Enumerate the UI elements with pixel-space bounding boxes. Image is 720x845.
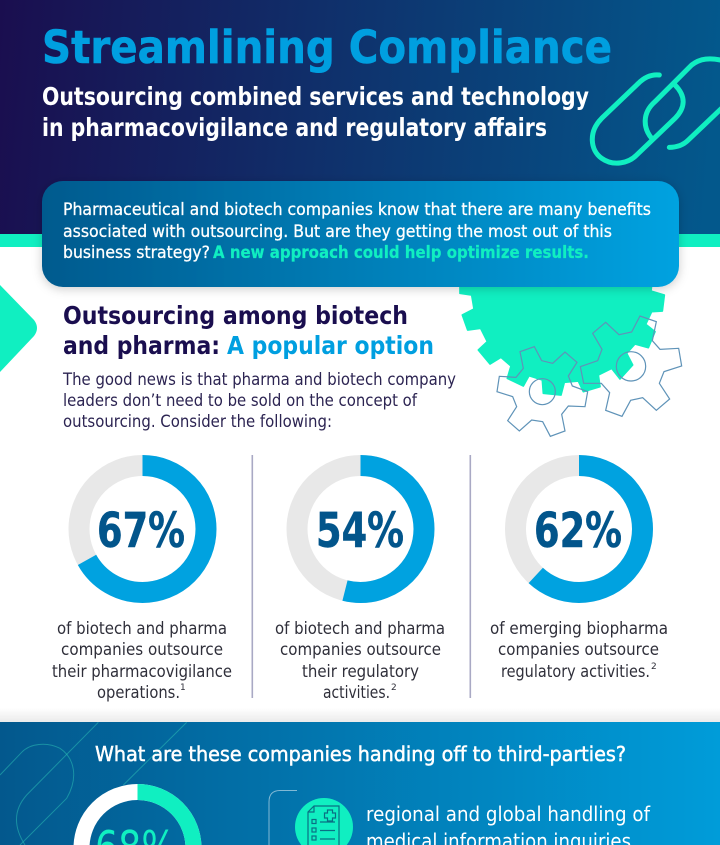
stat: 67%: 1 — [180, 683, 186, 693]
intro paragraph: The good news is that pharma and biotech company — [62, 370, 456, 390]
stat: 62%: 2 — [651, 662, 657, 672]
stat: 54%: 54% — [316, 503, 404, 559]
intro card: A new approach could help optimize results. — [213, 243, 589, 263]
outline gear right — [580, 316, 682, 416]
section heading: Outsourcing among biotech — [63, 301, 408, 330]
bottom section shadow — [0, 708, 720, 722]
stat: 68% — [82, 792, 194, 845]
stat: 62%: companies outsource — [498, 640, 659, 660]
stat: 67% — [52, 466, 232, 703]
intro card: associated with outsourcing. But are they getting the most out of this — [63, 222, 612, 242]
intro paragraph: outsourcing. Consider the following: — [63, 412, 332, 432]
stat: 54%: 2 — [391, 683, 397, 693]
icon: medical document — [295, 798, 353, 845]
left teal arrow tab — [0, 285, 37, 372]
section heading — [63, 301, 434, 360]
intro paragraph — [62, 370, 456, 432]
bracket line — [269, 790, 297, 845]
teal accent strip — [0, 234, 720, 247]
subtitle — [42, 82, 589, 142]
stat: 54%: their regulatory — [302, 662, 419, 682]
intro card: business strategy? — [63, 243, 210, 263]
section heading: and pharma: — [63, 331, 220, 360]
title: Streamlining Compliance — [42, 21, 612, 74]
stat: 67%: companies outsource — [61, 640, 223, 660]
section heading: A popular option — [227, 331, 434, 360]
stat: 54%: companies outsource — [280, 640, 441, 660]
list item text: regional and global handling of — [366, 802, 651, 826]
stat: 67%: operations. — [97, 683, 180, 703]
stat: 54%: of biotech and pharma — [275, 619, 445, 639]
stat: 67%: their pharmacovigilance — [52, 662, 232, 682]
intro paragraph: leaders don’t need to be sold on the concept of — [63, 391, 418, 411]
stat: 54% — [275, 466, 445, 703]
header background band — [0, 0, 720, 234]
bottom section background — [0, 722, 720, 845]
divider — [470, 455, 471, 698]
subtitle: in pharmacovigilance and regulatory affairs — [42, 113, 547, 142]
list item text — [366, 802, 651, 845]
subtitle: Outsourcing combined services and technology — [42, 82, 589, 111]
section question heading: What are these companies handing off to third-parties? — [95, 742, 626, 766]
divider — [252, 455, 253, 698]
background link outlines — [0, 722, 187, 845]
outline gear left — [497, 347, 588, 436]
intro card — [42, 181, 679, 287]
icon: chain link — [592, 59, 720, 163]
stat: 67%: of biotech and pharma — [57, 619, 227, 639]
stat: 62%: 62% — [534, 503, 622, 559]
big teal gear — [460, 285, 664, 395]
stat: 62%: regulatory activities. — [501, 662, 650, 682]
stat: 54%: activities. — [323, 683, 390, 703]
stat: 62% — [490, 466, 668, 682]
stat: 62%: of emerging biopharma — [490, 619, 668, 639]
stat: 67%: 67% — [97, 503, 185, 559]
intro card: Pharmaceutical and biotech companies know that there are many benefits — [63, 200, 651, 220]
